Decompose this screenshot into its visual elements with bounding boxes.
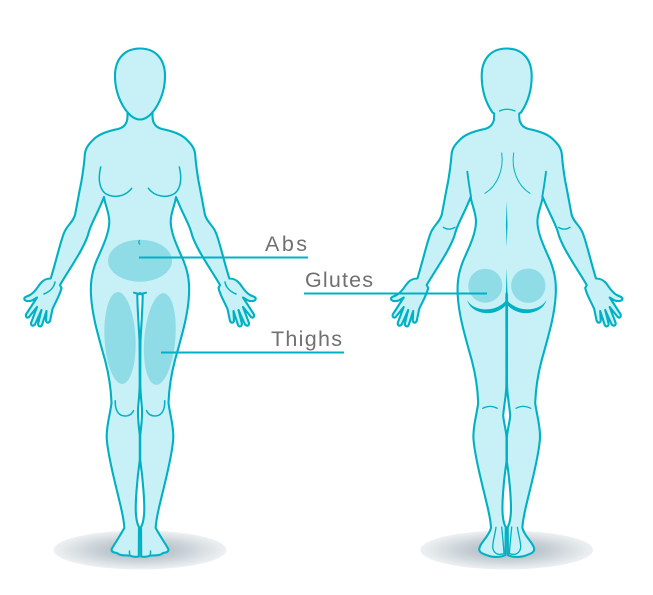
figure: front view: [24, 48, 256, 557]
highlighted muscle: right glute: [511, 268, 546, 303]
shadow: back figure: [420, 530, 593, 570]
callout: abs: Abs: [265, 232, 307, 256]
navel: [138, 240, 141, 244]
spine, tapered: [506, 201, 508, 247]
back body fill and outline: [391, 110, 622, 557]
back details: neck, shoulder blades, spine, elbows, knees, heels: [443, 109, 570, 554]
shadow: front figure: [54, 530, 226, 570]
neck cover: [495, 108, 518, 124]
highlighted muscle: abs: [108, 240, 172, 282]
highlighted muscle: left glute: [468, 269, 502, 303]
front head: [115, 48, 165, 120]
back head: [482, 48, 532, 114]
highlighted muscle: right thigh: [140, 292, 179, 386]
figure: back view: [391, 48, 622, 557]
cleft, tapered: [506, 268, 508, 300]
callout: thighs: Thighs: [271, 327, 342, 351]
gluteal crease, tapered: [467, 299, 546, 313]
front body fill and outline: [24, 110, 256, 557]
callout: glutes: Glutes: [305, 268, 373, 292]
highlighted muscle: left thigh: [102, 291, 138, 385]
front details: chest, knees, palms, toes: [44, 167, 236, 556]
